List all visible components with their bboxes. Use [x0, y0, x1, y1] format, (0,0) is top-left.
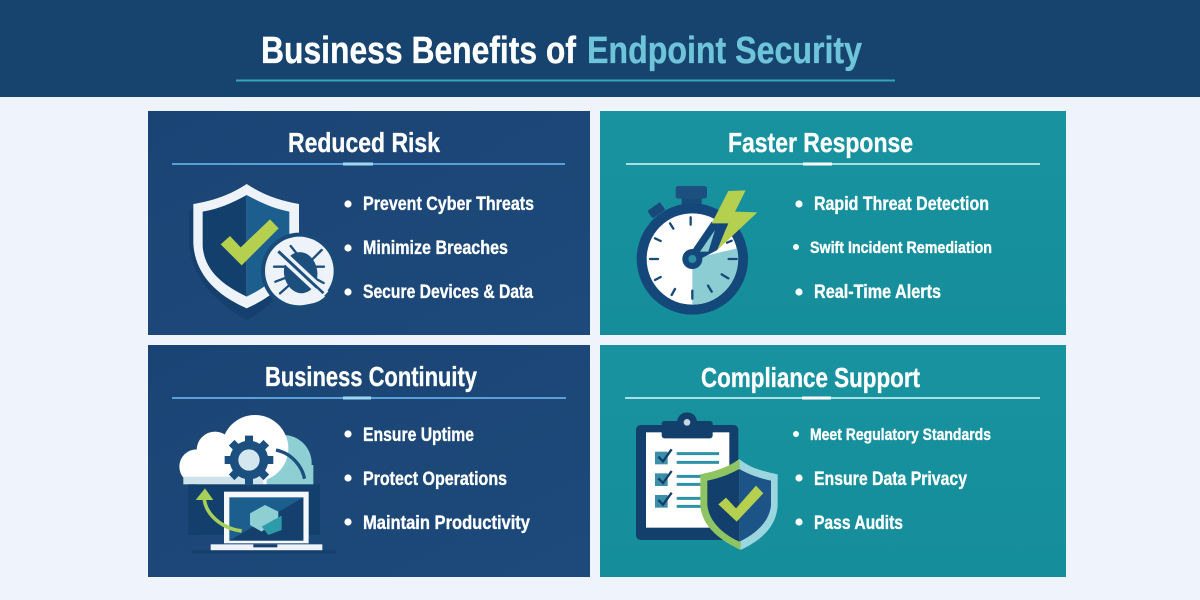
- bullet: rapid threat detection: Rapid Threat Detection: [814, 193, 989, 215]
- panel: compliance support: [600, 345, 1066, 577]
- panel: faster response: [600, 111, 1066, 335]
- heading: business continuity: Business Continuity: [265, 361, 477, 392]
- bullet: swift incident remediation: Swift Incident Remediation: [810, 238, 992, 257]
- heading: faster response: Faster Response: [728, 127, 913, 158]
- bullet: secure devices and data: Secure Devices & Data: [363, 281, 533, 303]
- icon: stopwatch with lightning: [637, 186, 757, 315]
- bullet: minimize breaches: Minimize Breaches: [363, 237, 508, 259]
- heading: compliance support: Compliance Support: [701, 362, 920, 393]
- bullet: protect operations: Protect Operations: [363, 468, 507, 490]
- header band: [0, 0, 1200, 97]
- bullet: ensure data privacy: Ensure Data Privacy: [814, 468, 967, 490]
- bullet: meet regulatory standards: Meet Regulatory Standards: [810, 425, 991, 444]
- icon: shield with crossed-out bug: [189, 184, 338, 320]
- bullet: ensure uptime: Ensure Uptime: [363, 424, 474, 446]
- panel: business continuity: [148, 345, 590, 577]
- bullet: prevent cyber threats: Prevent Cyber Threats: [363, 193, 534, 215]
- title: Endpoint Security: [587, 30, 862, 72]
- icon: clipboard with shield: [636, 412, 778, 550]
- title: Business Benefits of: [261, 30, 576, 72]
- bullet: pass audits: Pass Audits: [814, 512, 903, 534]
- icon: cloud, gear and laptop: [179, 415, 336, 553]
- bullet: maintain productivity: Maintain Productivity: [363, 512, 530, 534]
- panel: reduced risk: [148, 111, 590, 335]
- bullet: real-time alerts: Real-Time Alerts: [814, 281, 941, 303]
- heading: reduced risk: Reduced Risk: [288, 127, 440, 158]
- bullet: pass audits: [795, 512, 903, 534]
